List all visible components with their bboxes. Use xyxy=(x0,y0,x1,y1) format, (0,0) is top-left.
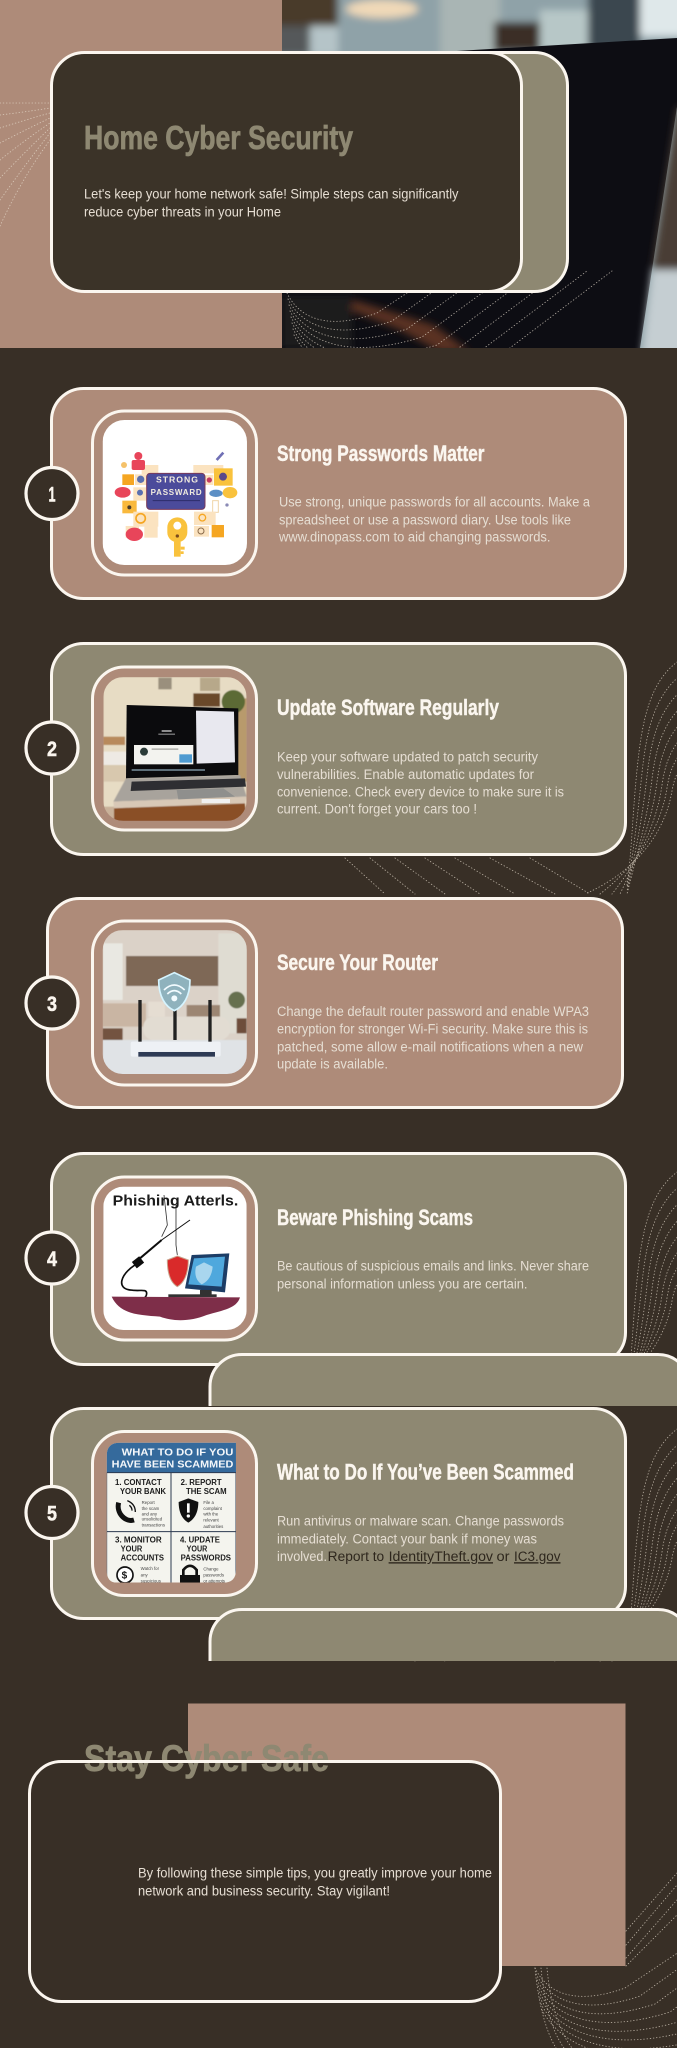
poster: what to do if scammed xyxy=(107,1443,237,1588)
panel: update software xyxy=(26,644,626,854)
heading 3: Secure Your Router xyxy=(277,950,438,975)
body text 5: Run antivirus or malware scan. Change passwords xyxy=(277,1514,564,1528)
body text 3: Change the default router password and enable WPA3 xyxy=(277,1004,589,1019)
body text 5: immediately. Contact your bank if money was xyxy=(277,1532,537,1547)
title: Home Cyber Security xyxy=(84,119,354,156)
poster: what to do if scammed: any xyxy=(141,1573,148,1578)
poster: what to do if scammed: Change xyxy=(203,1567,219,1572)
header photo: laptop in a room xyxy=(282,0,677,348)
photo: laptop updating xyxy=(103,677,247,821)
poster: what to do if scammed: authorities xyxy=(203,1524,223,1529)
poster: what to do if scammed: ACCOUNTS xyxy=(121,1554,165,1563)
closing card outline xyxy=(30,1762,500,2002)
number badge 1: 1 xyxy=(48,484,56,506)
body text 1 xyxy=(278,495,590,545)
icon: strong password illustration: STRONG xyxy=(156,475,198,485)
body text 5: or xyxy=(496,1549,510,1564)
image frame 1 xyxy=(92,411,256,575)
photo: router with wifi shield xyxy=(103,930,247,1075)
intro text: Let's keep your home network safe! Simple steps can significantly xyxy=(84,187,459,202)
body text 1: spreadsheet or use a password diary. Use tools like xyxy=(279,512,571,527)
closing text: network and business security. Stay vigilant! xyxy=(138,1884,390,1899)
header band: pink block xyxy=(0,0,282,348)
poster: what to do if scammed: and any xyxy=(142,1511,158,1516)
poster: what to do if scammed: 1. CONTACT xyxy=(115,1478,162,1487)
poster: what to do if scammed: YOUR xyxy=(121,1545,143,1554)
body text 5: Report to xyxy=(328,1549,384,1564)
heading 2: Update Software Regularly xyxy=(277,695,500,720)
closing text xyxy=(138,1866,492,1899)
header back card xyxy=(250,52,568,292)
number badge 1 xyxy=(26,468,78,520)
poster: what to do if scammed: Report xyxy=(142,1500,155,1505)
body text 2: vulnerabilities. Enable automatic updates for xyxy=(277,767,534,782)
body text 2 xyxy=(277,749,564,817)
poster: what to do if scammed: 4. UPDATE xyxy=(180,1536,221,1545)
panel: secure router xyxy=(26,898,622,1108)
poster: what to do if scammed: File a xyxy=(203,1500,214,1505)
body text 3: update is available. xyxy=(277,1057,388,1072)
poster: what to do if scammed: YOUR xyxy=(187,1545,208,1554)
image frame 2 xyxy=(92,667,256,830)
panel: been scammed xyxy=(26,1408,626,1618)
poster: what to do if scammed: PASSWORDS xyxy=(181,1554,232,1563)
body text 5 xyxy=(277,1514,564,1564)
number badge 4 xyxy=(26,1232,78,1284)
decorative tab below panel 5 xyxy=(208,1608,677,1661)
number badge 2 xyxy=(26,722,78,774)
poster: what to do if scammed: WHAT TO DO IF YOU xyxy=(122,1447,233,1458)
body text 4 xyxy=(277,1259,589,1292)
illustration: phishing hook and computer xyxy=(103,1187,247,1330)
number badge 3: 3 xyxy=(47,993,57,1016)
poster: what to do if scammed: transactions xyxy=(142,1523,165,1528)
poster: what to do if scammed: 3. MONITOR xyxy=(115,1536,162,1545)
poster: what to do if scammed: or attempts xyxy=(203,1579,225,1584)
body text 5: involved. xyxy=(277,1549,327,1564)
image frame 4 xyxy=(92,1177,256,1340)
body text 2: convenience. Check every device to make sure it is xyxy=(277,785,564,800)
poster: what to do if scammed: HAVE BEEN SCAMMED xyxy=(112,1460,233,1471)
panel: phishing xyxy=(26,1154,626,1364)
header card xyxy=(52,52,522,292)
number badge 2: 2 xyxy=(47,738,57,761)
number badge 5 xyxy=(26,1486,78,1538)
body text 2: Keep your software updated to patch security xyxy=(277,749,538,764)
panel: strong passwords xyxy=(26,388,626,598)
closing title: Stay Cyber Safe xyxy=(84,1738,329,1779)
heading 5: What to Do If You’ve Been Scammed xyxy=(277,1459,574,1484)
image frame 5 xyxy=(92,1432,256,1596)
poster: what to do if scammed: with the xyxy=(203,1511,219,1516)
number badge 3 xyxy=(26,977,78,1029)
image frame 3 xyxy=(92,921,256,1085)
number badge 4: 4 xyxy=(47,1248,57,1271)
decorative dots left of header card xyxy=(0,103,50,226)
poster: what to do if scammed: suspicious xyxy=(141,1579,161,1584)
body text 4: Be cautious of suspicious emails and links. Never share xyxy=(277,1259,589,1274)
poster: what to do if scammed: $ xyxy=(122,1571,128,1582)
number badge 5: 5 xyxy=(47,1502,57,1526)
body text 5: IC3.gov xyxy=(514,1549,561,1564)
illustration: phishing hook and computer: Phishing Atterls. xyxy=(113,1194,238,1210)
poster: what to do if scammed: YOUR BANK xyxy=(120,1487,166,1496)
poster: what to do if scammed: unsolicited xyxy=(142,1517,163,1522)
closing card xyxy=(30,1738,500,2002)
decorative tab behind panel 5 xyxy=(208,1353,677,1406)
poster: what to do if scammed: 2. REPORT xyxy=(181,1478,222,1487)
heading 1: Strong Passwords Matter xyxy=(277,441,485,466)
closing pink block xyxy=(188,1704,626,1966)
body text 3: encryption for stronger Wi-Fi security. Make sure this is xyxy=(277,1022,588,1037)
closing text: By following these simple tips, you greatly improve your home xyxy=(138,1866,492,1881)
body text 3: patched, some allow e-mail notifications when a new xyxy=(277,1039,583,1054)
intro text: reduce cyber threats in your Home xyxy=(84,205,281,220)
body text 1: www.dinopass.com to aid changing passwords. xyxy=(278,530,550,545)
body text 1: Use strong, unique passwords for all accounts. Make a xyxy=(279,495,590,510)
poster: what to do if scammed: complaint xyxy=(203,1506,223,1511)
icon: strong password illustration: PASSWARD xyxy=(151,488,202,497)
poster: what to do if scammed: passwords xyxy=(203,1573,224,1578)
icon: strong password illustration xyxy=(103,420,247,565)
poster: what to do if scammed: THE SCAM xyxy=(186,1487,227,1496)
heading 4: Beware Phishing Scams xyxy=(277,1205,473,1230)
poster: what to do if scammed: relevant xyxy=(203,1517,220,1522)
body text 4: personal information unless you are certain. xyxy=(277,1277,528,1292)
body text 2: current. Don't forget your cars too ! xyxy=(277,802,477,817)
poster: what to do if scammed: Watch for xyxy=(141,1566,160,1571)
poster: what to do if scammed: the scam xyxy=(142,1506,160,1511)
body text 5: IdentityTheft.gov xyxy=(389,1549,493,1564)
body text 3 xyxy=(277,1004,589,1072)
intro text xyxy=(84,187,459,220)
